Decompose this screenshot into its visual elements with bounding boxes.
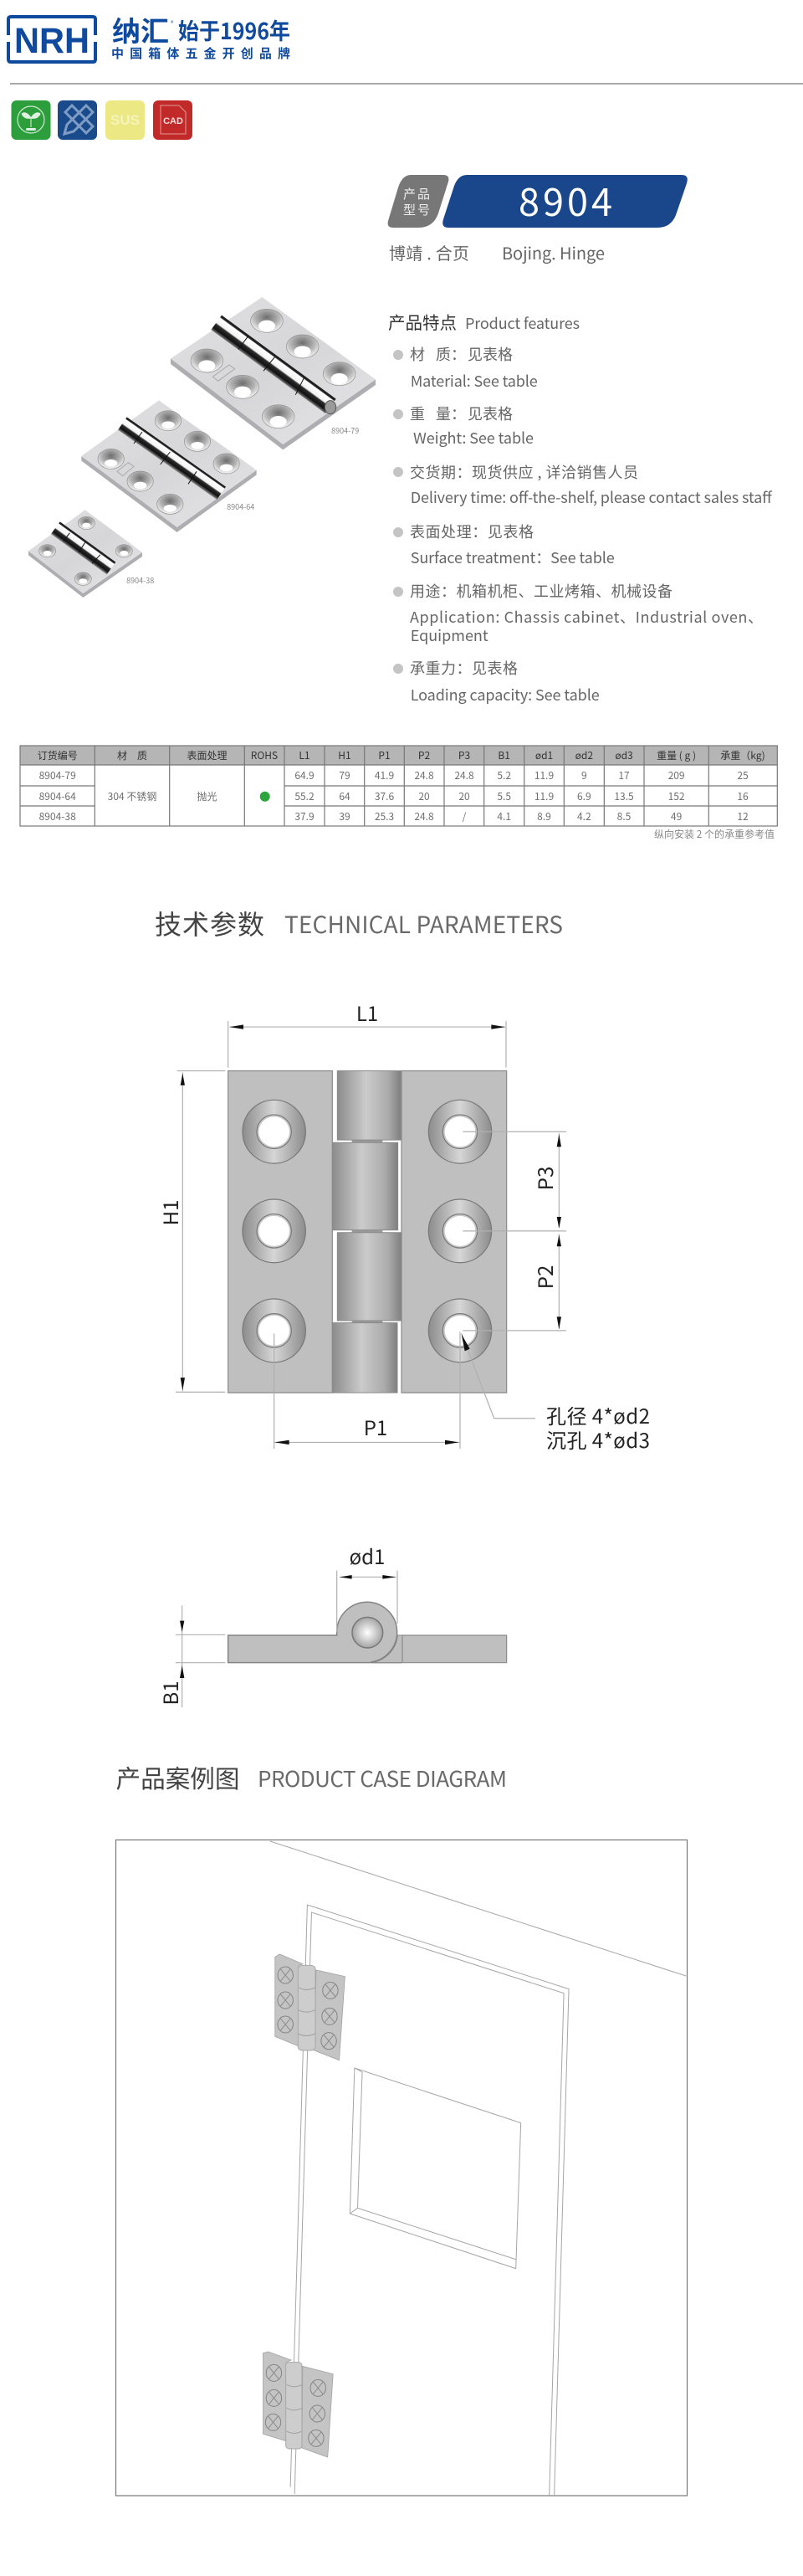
side profile [228, 1602, 507, 1663]
heading: product features [388, 309, 580, 334]
feature: weight: 见表格 [468, 403, 513, 424]
table row 8904-64 [39, 789, 749, 803]
dimension arrows [181, 1024, 561, 1445]
table row 8904-64: 5.5 [497, 789, 511, 803]
photo label 64: 8904-64 [227, 501, 254, 512]
feature: application: Application: Chassis cabinet、Industrial oven、 [410, 606, 763, 628]
model badge: 型号 [403, 201, 430, 218]
dimension lines [176, 1021, 566, 1449]
feature: material: 材 [410, 343, 425, 365]
table row 8904-64: 55.2 [294, 789, 315, 803]
photo label 79: 8904-79 [331, 425, 359, 436]
hinge: lower [263, 2352, 333, 2457]
table row 8904-79: 209 [668, 768, 685, 783]
feature: delivery: Delivery time: off-the-shelf, please contact sales staff [411, 486, 773, 508]
table row 8904-64: 11.9 [534, 789, 554, 803]
feature: material [393, 343, 538, 392]
table row 8904-64: 16 [737, 789, 749, 803]
icon: SUS yellow: SUS [110, 112, 140, 128]
product name: Bojing. Hinge [502, 240, 605, 264]
table header: ød2 [575, 748, 593, 762]
table row 8904-79: 79 [339, 768, 350, 783]
label hole sizes: 沉孔 4*ød3 [546, 1424, 650, 1454]
table row 8904-64: 20 [418, 789, 430, 803]
technical drawing: side view [155, 1541, 507, 1707]
case diagram frame [115, 1840, 688, 2496]
table row 8904-64: 20 [458, 789, 470, 803]
feature: weight: Weight: See table [413, 427, 534, 449]
table row 8904-38 [39, 809, 749, 824]
table row 8904-79: 11.9 [534, 768, 554, 783]
spec table [20, 746, 777, 826]
hinge: upper [275, 1954, 345, 2060]
brand slogan: ® [171, 19, 174, 28]
table row 8904-38: 37.9 [294, 809, 315, 824]
table row 8904-38: 39 [339, 809, 350, 824]
table header: P2 [418, 748, 430, 762]
table header: P1 [378, 748, 391, 762]
hinge knuckles [332, 1071, 402, 1393]
icon: SUS yellow [105, 100, 145, 140]
table header: P3 [458, 748, 470, 762]
feature: surface: Surface treatment：See table [411, 547, 615, 568]
feature: application: 用途：机箱机柜、工业烤箱、机械设备 [410, 580, 673, 602]
cabinet door outlines [270, 1841, 686, 2496]
model badge: 产品 [403, 185, 430, 203]
feature: loading [393, 657, 600, 706]
table row 8904-38: 8904-38 [39, 809, 76, 824]
model badge: 8904 [519, 172, 612, 227]
heading: product features: Product features [465, 312, 580, 334]
icon: CAD red [153, 100, 192, 140]
label H1: H1 [155, 1200, 184, 1225]
table row 8904-64: 304 不锈钢 [108, 789, 156, 803]
table header: ød1 [535, 748, 553, 762]
feature: weight: 重 [410, 403, 425, 424]
table row 8904-79: 25 [737, 768, 749, 783]
table header: L1 [299, 748, 310, 762]
side arrows [180, 1575, 396, 1678]
heading: technical parameters [155, 904, 563, 942]
feature: loading: 承重力：见表格 [410, 657, 518, 679]
table row 8904-64: 抛光 [197, 789, 217, 803]
mounting holes [243, 1100, 492, 1362]
heading: product case diagram [115, 1759, 507, 1795]
heading: technical parameters: 技术参数 [155, 904, 264, 942]
icon: CAD red: CAD [163, 116, 183, 126]
table header: ød3 [615, 748, 633, 762]
feature: application [393, 580, 763, 646]
heading: product case diagram: PRODUCT CASE DIAGRAM [258, 1763, 507, 1793]
label P3: P3 [529, 1167, 559, 1190]
logo: NRH badge: NRH [14, 21, 90, 61]
product name: 博靖 . 合页 [389, 240, 469, 264]
table row 8904-79 [39, 768, 749, 783]
icon: design tools blue [58, 100, 97, 140]
model badge [388, 172, 688, 228]
feature: loading: Loading capacity: See table [411, 684, 600, 706]
table row 8904-64: 64 [339, 789, 350, 803]
table row 8904-79: 8904-79 [39, 768, 76, 783]
hinge leaves [228, 1071, 507, 1393]
table row 8904-38: 49 [671, 809, 682, 824]
table header: ROHS [251, 748, 278, 762]
label P1: P1 [364, 1412, 387, 1441]
table header: 承重（kg) [720, 748, 765, 762]
feature: material: 见表格 [468, 343, 513, 365]
table row 8904-38: 24.8 [414, 809, 434, 824]
feature: material: Material: See table [411, 370, 538, 392]
table row 8904-38: 12 [737, 809, 749, 824]
table row 8904-38: 8.9 [537, 809, 551, 824]
hinge 8904-38 [28, 510, 142, 598]
photo label 38: 8904-38 [126, 575, 154, 586]
feature: surface [393, 521, 615, 568]
feature: surface: 表面处理：见表格 [410, 521, 534, 542]
table header: 材 质 [117, 748, 147, 762]
feature: application: Equipment [411, 624, 488, 646]
table row 8904-79: 24.8 [454, 768, 474, 783]
hinge 8904-64 [81, 400, 257, 532]
table row 8904-79: 24.8 [414, 768, 434, 783]
table row 8904-79: 9 [581, 768, 587, 783]
table header: B1 [498, 748, 510, 762]
table row 8904-79: 64.9 [294, 768, 315, 783]
icon: RoHS green [12, 100, 50, 140]
table row 8904-64: 37.6 [375, 789, 394, 803]
table row 8904-64: 6.9 [577, 789, 591, 803]
label hole sizes [546, 1400, 650, 1454]
table row 8904-38: 8.5 [617, 809, 632, 824]
table row 8904-64: 13.5 [614, 789, 634, 803]
heading: product case diagram: 产品案例图 [115, 1759, 239, 1795]
table header [38, 748, 765, 762]
label B1: B1 [155, 1681, 184, 1706]
table row 8904-38: 4.1 [497, 809, 511, 824]
feature: delivery: 交货期：现货供应 , 详洽销售人员 [410, 461, 638, 483]
product photo: three hinges [28, 297, 376, 598]
table header: 订货编号 [38, 748, 78, 762]
feature: weight: 量： [436, 403, 466, 424]
feature: material: 质： [436, 343, 466, 365]
heading: technical parameters: TECHNICAL PARAMETERS [284, 907, 563, 941]
brand slogan: 始于1996年 [178, 13, 290, 46]
table footnote: 纵向安装 2 个的承重参考值 [654, 827, 775, 841]
table header: H1 [338, 748, 351, 762]
product name [389, 240, 605, 264]
technical drawing: front view [155, 998, 650, 1454]
table row 8904-38: 4.2 [577, 809, 591, 824]
feature: weight [393, 403, 534, 449]
brand slogan: 纳汇 [112, 9, 169, 49]
table row 8904-79: 41.9 [375, 768, 394, 783]
label L1: L1 [356, 998, 378, 1027]
table row 8904-38: 25.3 [375, 809, 394, 824]
table row 8904-64: 8904-64 [39, 789, 76, 803]
brand slogan: 中国箱体五金开创品牌 [111, 44, 290, 62]
table header: 重量 ( g ) [657, 748, 696, 762]
brand slogan [111, 9, 290, 62]
table row 8904-38: / [463, 809, 467, 824]
table row 8904-64: 152 [668, 789, 685, 803]
table row 8904-79: 5.2 [497, 768, 511, 783]
table header: 表面处理 [187, 748, 228, 762]
hinge 8904-79 [171, 297, 376, 449]
label P2: P2 [529, 1265, 559, 1289]
heading: product features: 产品特点 [388, 309, 457, 334]
label hole sizes: 孔径 4*ød2 [546, 1400, 650, 1429]
RoHS compliant dot [260, 792, 270, 802]
label d1: ød1 [350, 1541, 385, 1570]
table row 8904-79: 17 [618, 768, 630, 783]
feature: delivery [393, 461, 773, 508]
side dimensions [176, 1571, 397, 1707]
